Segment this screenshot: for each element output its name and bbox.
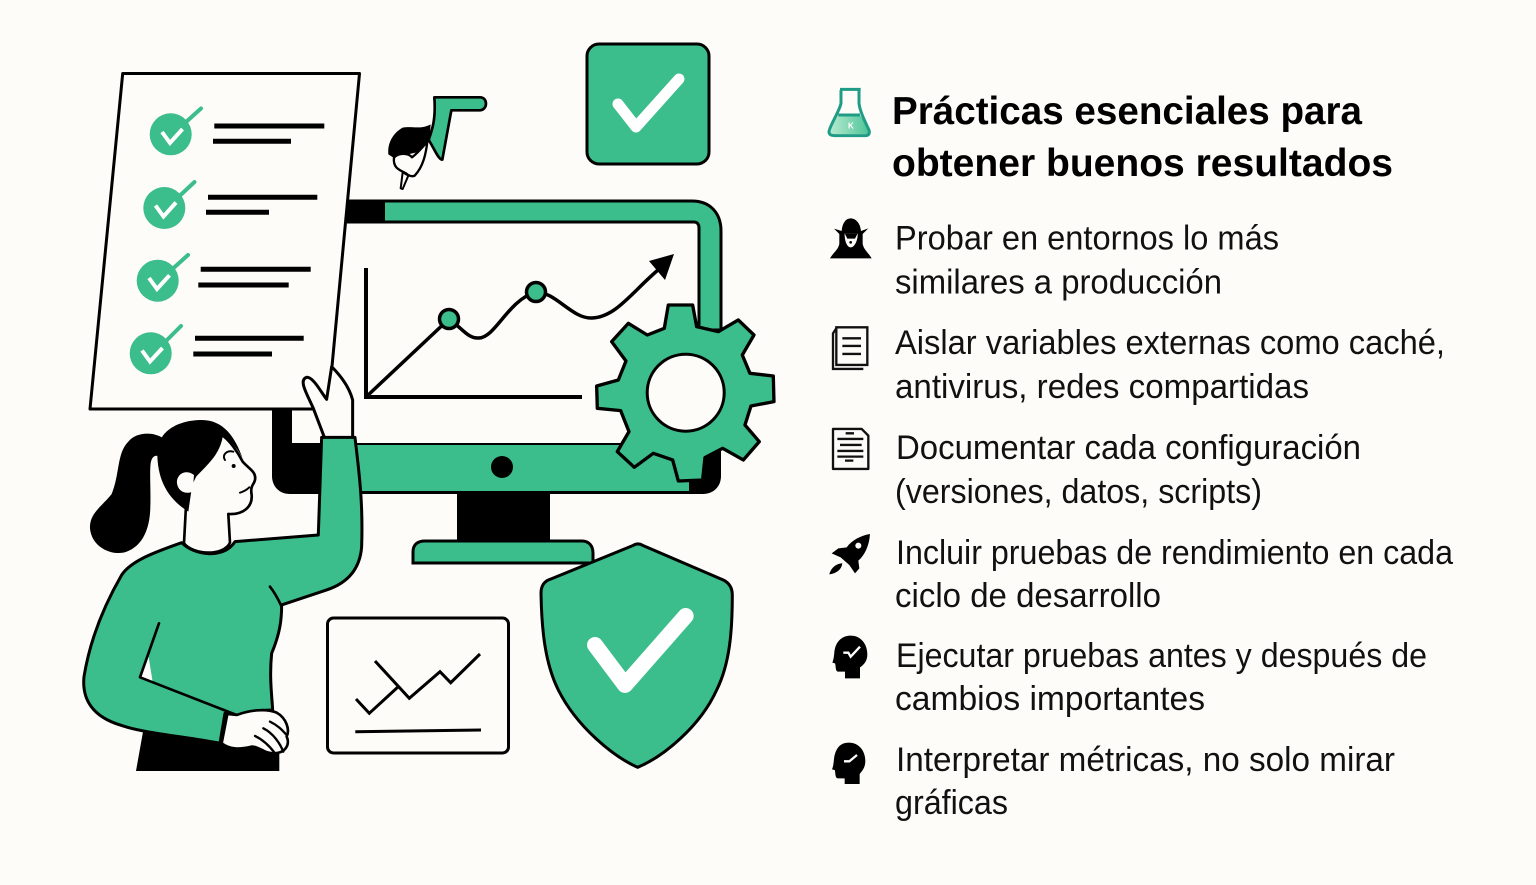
lower hand [222,710,288,753]
text: Incluir pruebas de rendimiento en cada [896,534,1453,572]
text: cambios importantes [895,680,1205,718]
text: Aislar variables externas como caché, [895,324,1445,362]
monitor base [413,541,593,563]
text [895,741,1395,822]
practice list [829,218,1453,822]
check item 2 [143,182,317,229]
text: Documentar cada configuración [896,429,1361,467]
small chart card [328,618,508,753]
item 4 [829,534,1453,615]
trousers [136,730,279,771]
monitor [272,201,721,563]
icon: green check square [587,44,709,164]
ear [177,472,194,493]
item 6 [832,741,1395,822]
text [895,220,1279,302]
line chart on screen [366,254,674,397]
icon: gear [597,305,774,481]
check item 3 [137,255,311,302]
text [895,534,1453,615]
text: ciclo de desarrollo [895,577,1161,615]
icon: flask: K [848,122,854,131]
icon: shield with check [541,544,732,767]
icon: pointing hand and boot shape [388,97,486,189]
text: gráficas [895,784,1008,822]
title [892,90,1393,185]
text [895,637,1427,718]
text: (versiones, datos, scripts) [895,473,1262,511]
icon: stacked documents [833,327,867,369]
checklist paper [90,74,360,409]
text: Interpretar métricas, no solo mirar [896,741,1395,779]
illustration: testing workspace [84,44,774,771]
raised hand [303,367,353,443]
title: Prácticas esenciales para [892,90,1362,133]
monitor frame bottom [272,405,721,494]
monitor button [491,456,513,478]
item 5 [832,636,1427,718]
text [895,324,1445,406]
text: Ejecutar pruebas antes y después de [896,637,1427,675]
item 3 [833,429,1361,511]
monitor frame top [345,201,721,330]
icon: document [833,429,868,469]
icon: spy figure [830,218,872,258]
monitor stand [457,490,550,542]
icon: flask [829,89,869,136]
check item 1 [150,108,324,155]
person [84,420,362,771]
face and neck [184,435,255,553]
check item 4 [130,326,304,374]
hair [157,420,243,512]
heading block [829,89,1393,185]
item 1 [830,218,1279,302]
icon: rocket [829,534,870,574]
text: Probar en entornos lo más [895,220,1279,258]
green sweater [84,437,362,743]
arm gap and fold lines [141,655,153,682]
text [895,429,1361,511]
facial features [224,451,249,493]
title: obtener buenos resultados [892,142,1393,185]
text: antivirus, redes compartidas [895,368,1309,406]
ponytail [90,434,163,553]
icon: head with check [832,636,867,678]
item 2 [833,324,1445,406]
text: similares a producción [895,264,1222,302]
icon: head with gauge [832,743,865,784]
